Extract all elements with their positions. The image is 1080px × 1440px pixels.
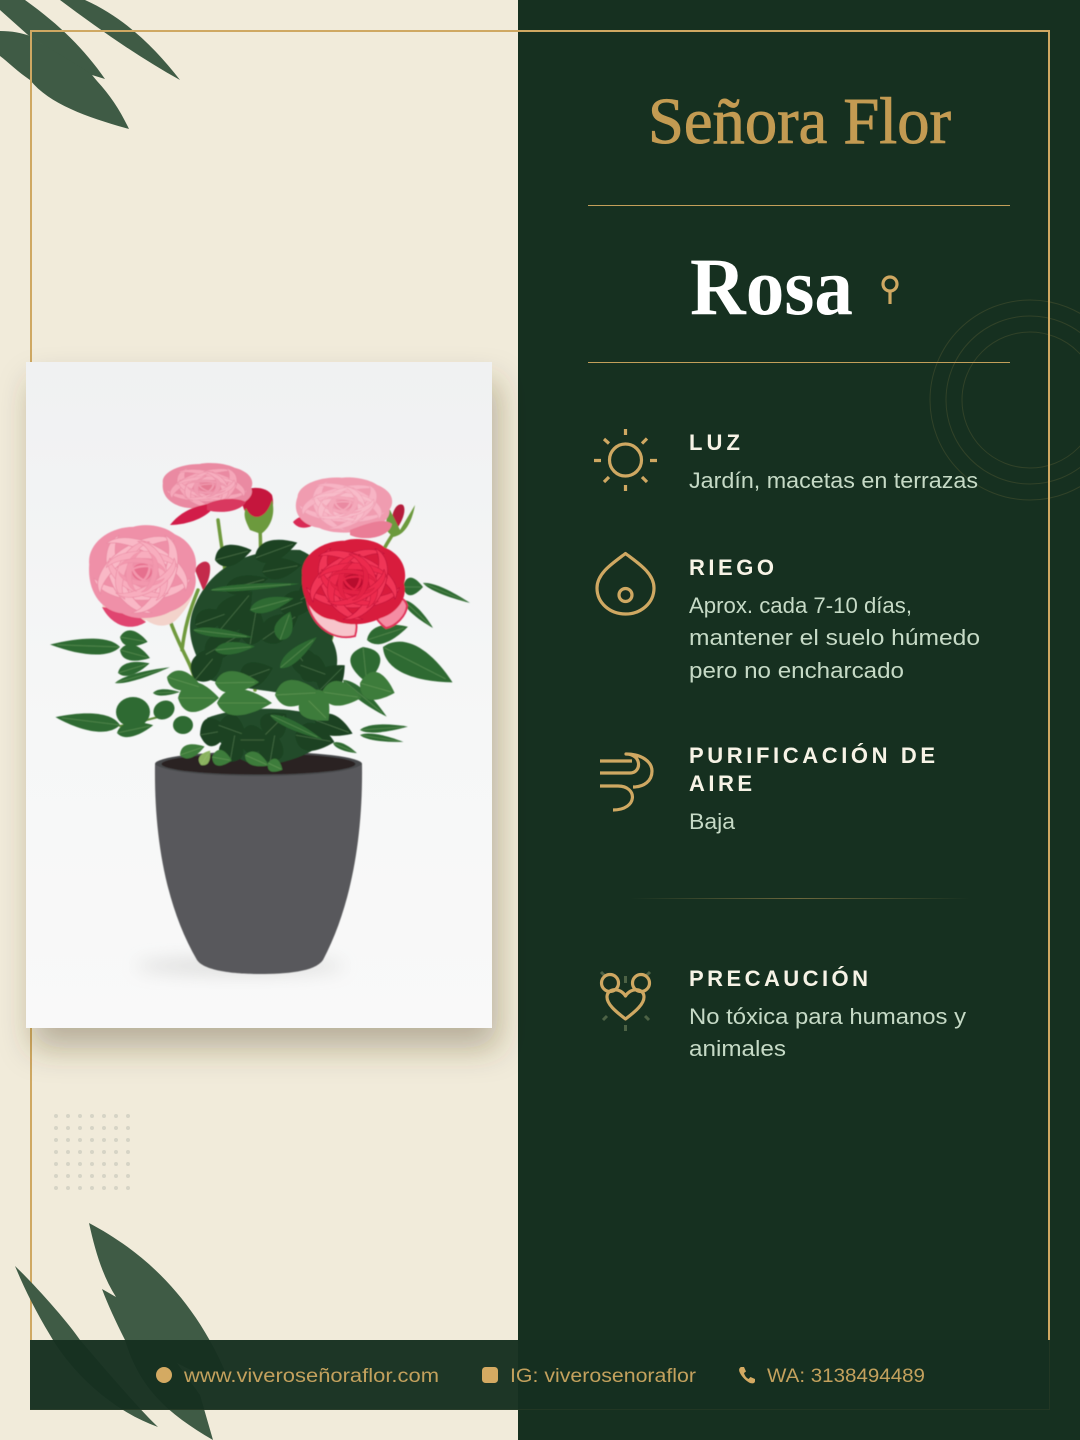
heading — [689, 743, 935, 796]
faded divider — [630, 898, 970, 899]
text: pero no encharcado — [689, 658, 904, 683]
footer band — [30, 1340, 1050, 1410]
right dark green panel — [518, 0, 1080, 1440]
divider bottom — [588, 362, 1010, 363]
section: precaucion — [601, 966, 966, 1061]
text: animales — [689, 1036, 786, 1061]
pot ground shadow — [135, 958, 345, 974]
icon: water drop — [597, 554, 654, 614]
rose buds — [195, 488, 415, 590]
section: riego — [597, 554, 980, 683]
footer: instagram: IG: viverosenoraflor — [510, 1366, 697, 1387]
text: No tóxica para humanos y — [689, 1004, 966, 1029]
text — [689, 1004, 966, 1061]
rose: left big pink — [84, 524, 201, 627]
heading: LUZ — [689, 430, 740, 455]
stems — [120, 520, 395, 726]
leaves: top left — [0, 0, 180, 129]
plant name: Rosa — [690, 241, 853, 332]
section: purificacion de aire — [600, 743, 935, 834]
heading: RIEGO — [689, 555, 774, 580]
text: Baja — [689, 809, 736, 834]
icon: pin symbol — [883, 277, 897, 304]
heading: PURIFICACIÓN DE — [689, 743, 935, 768]
heading: PRECAUCIÓN — [689, 966, 868, 991]
leaves: bottom left — [15, 1223, 230, 1440]
rose: top left pink — [158, 462, 256, 525]
footer: website: www.viveroseñoraflor.com — [183, 1366, 439, 1387]
rose: top right pink — [285, 472, 402, 538]
text: Aprox. cada 7-10 días, — [689, 593, 912, 618]
text: Jardín, macetas en terrazas — [689, 468, 978, 493]
left cream background — [0, 0, 518, 1440]
flower pot — [155, 752, 362, 974]
decorative dot grid — [50, 1110, 134, 1194]
photo card with potted rose — [26, 362, 492, 1028]
text: mantener el suelo húmedo — [689, 625, 980, 650]
icon: wind — [600, 754, 652, 810]
mid foliage — [50, 578, 471, 756]
bright foliage — [164, 667, 399, 775]
divider top — [588, 205, 1010, 206]
heading: AIRE — [689, 771, 752, 796]
section: luz — [594, 429, 978, 493]
text — [689, 593, 980, 683]
brand title: Señora Flor — [648, 85, 951, 158]
dark foliage behind — [184, 532, 356, 764]
rose: red — [297, 538, 409, 637]
pale new leaf — [196, 748, 214, 768]
decorative circles — [930, 300, 1080, 500]
icon: heart with circles — [601, 972, 650, 1031]
icon: sun — [594, 429, 657, 491]
dark foliage mass — [190, 550, 337, 766]
footer: whatsapp: WA: 3138494489 — [767, 1366, 925, 1387]
